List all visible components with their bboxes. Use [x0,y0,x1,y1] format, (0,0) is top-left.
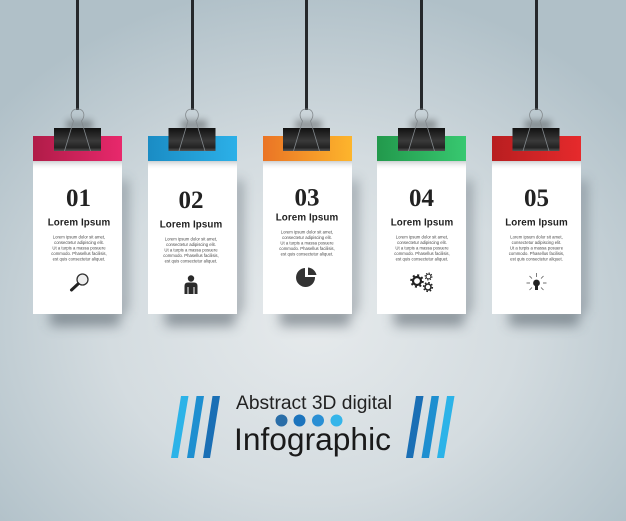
body text 01: commodo. Phasellus facilisis, [51,251,107,256]
card shadow 05 [509,180,586,326]
white card 05 [492,161,581,314]
body text 05: Lorem ipsum dolor sit amet, [510,234,563,240]
body text 02: Lorem ipsum dolor sit amet, [165,236,217,242]
body text 01: Lorem ipsum dolor sit amet, [53,234,105,240]
heading 03: Lorem Ipsum [276,212,338,224]
heading 02: Lorem Ipsum [160,220,222,230]
panel: card 01 [33,0,127,326]
left stripes [171,396,220,458]
white card 03 [263,161,352,314]
body text 01: consectetur adipiscing elit. [54,240,104,245]
number 02: 02 [178,187,204,214]
body text 05: Ut a turpis a massa posuere [510,246,564,250]
body text 01: est quis consectetur aliquet. [53,256,105,262]
hanging cord 03 [305,0,308,110]
binder clip 01 [54,109,101,151]
card shadow 01 [50,180,127,326]
white card 04 [377,161,466,314]
body text 04: Ut a turpis a massa posuere [395,246,449,250]
binder clip 05 [512,109,560,151]
body text 03: Lorem ipsum dolor sit amet, [281,230,333,234]
shade under band 03 [263,161,352,170]
body text 01 [51,234,107,262]
body text 03: est quis consectetur aliquet. [281,252,333,256]
white card 01 [33,161,122,314]
hanging cord 02 [191,0,194,110]
colour band 05 [492,136,581,161]
number 03: 03 [294,184,320,212]
white card 02 [148,161,237,314]
card shadow 02 [165,180,242,326]
body text 04: Lorem ipsum dolor sit amet, [396,234,448,240]
colour band 02 [148,136,237,161]
title: Infographic: Infographic [234,422,391,457]
body text 05: commodo. Phasellus facilisis, [509,251,564,256]
body text 05 [509,234,564,262]
icon: gears [411,273,432,291]
body text 02 [163,236,219,264]
icon: businessman [184,275,198,294]
body text 04: commodo. Phasellus facilisis, [394,251,450,256]
body text 04: est quis consectetur aliquet. [396,256,448,262]
shade under band 05 [492,161,581,170]
card shadow 04 [394,180,471,326]
body text 04 [394,234,450,262]
card shadow 03 [280,180,357,326]
body text 05: consectetur adipiscing elit. [512,240,561,245]
body text 02: est quis consectetur aliquet. [165,258,217,264]
body text 03: commodo. Phasellus facilisis, [279,246,335,251]
right stripes [406,396,454,458]
heading 01: Lorem Ipsum [48,218,110,228]
number 05: 05 [524,185,549,212]
panel: card 04 [377,0,471,326]
body text 03: consectetur adipiscing elit. [282,235,332,240]
hanging cord 01 [76,0,79,110]
colour band 01 [33,136,122,161]
body text 03: Ut a turpis a massa posuere [280,240,334,246]
hanging cord 04 [420,0,423,110]
icon: magnifying glass [72,274,88,290]
panel: card 05 [492,0,586,326]
hanging cord 05 [535,0,538,110]
title: Abstract 3D digital: Abstract 3D digital [236,393,392,414]
heading 04: Lorem Ipsum [391,218,453,228]
colour band 04 [377,136,466,161]
binder clip 03 [283,109,330,151]
binder clip 02 [168,109,216,151]
binder clip 04 [398,109,445,151]
icon: light bulb [526,273,546,290]
colour band 03 [263,136,352,161]
body text 03 [279,230,335,256]
panel: card 03 [263,0,357,326]
number 04: 04 [409,185,434,212]
icon: pie chart [296,268,316,287]
shade under band 01 [33,161,122,170]
heading 05: Lorem Ipsum [505,218,568,228]
panel: card 02 [148,0,242,326]
shade under band 04 [377,161,466,170]
body text 02: commodo. Phasellus facilisis, [163,253,219,258]
body text 02: Ut a turpis a massa posuere [164,248,218,252]
body text 01: Ut a turpis a massa posuere [52,246,106,250]
body text 05: est quis consectetur aliquet. [510,256,563,262]
body text 04: consectetur adipiscing elit. [397,240,447,245]
shade under band 02 [148,161,237,170]
dots [276,414,342,426]
number 01: 01 [66,185,91,212]
body text 02: consectetur adipiscing elit. [166,242,216,247]
